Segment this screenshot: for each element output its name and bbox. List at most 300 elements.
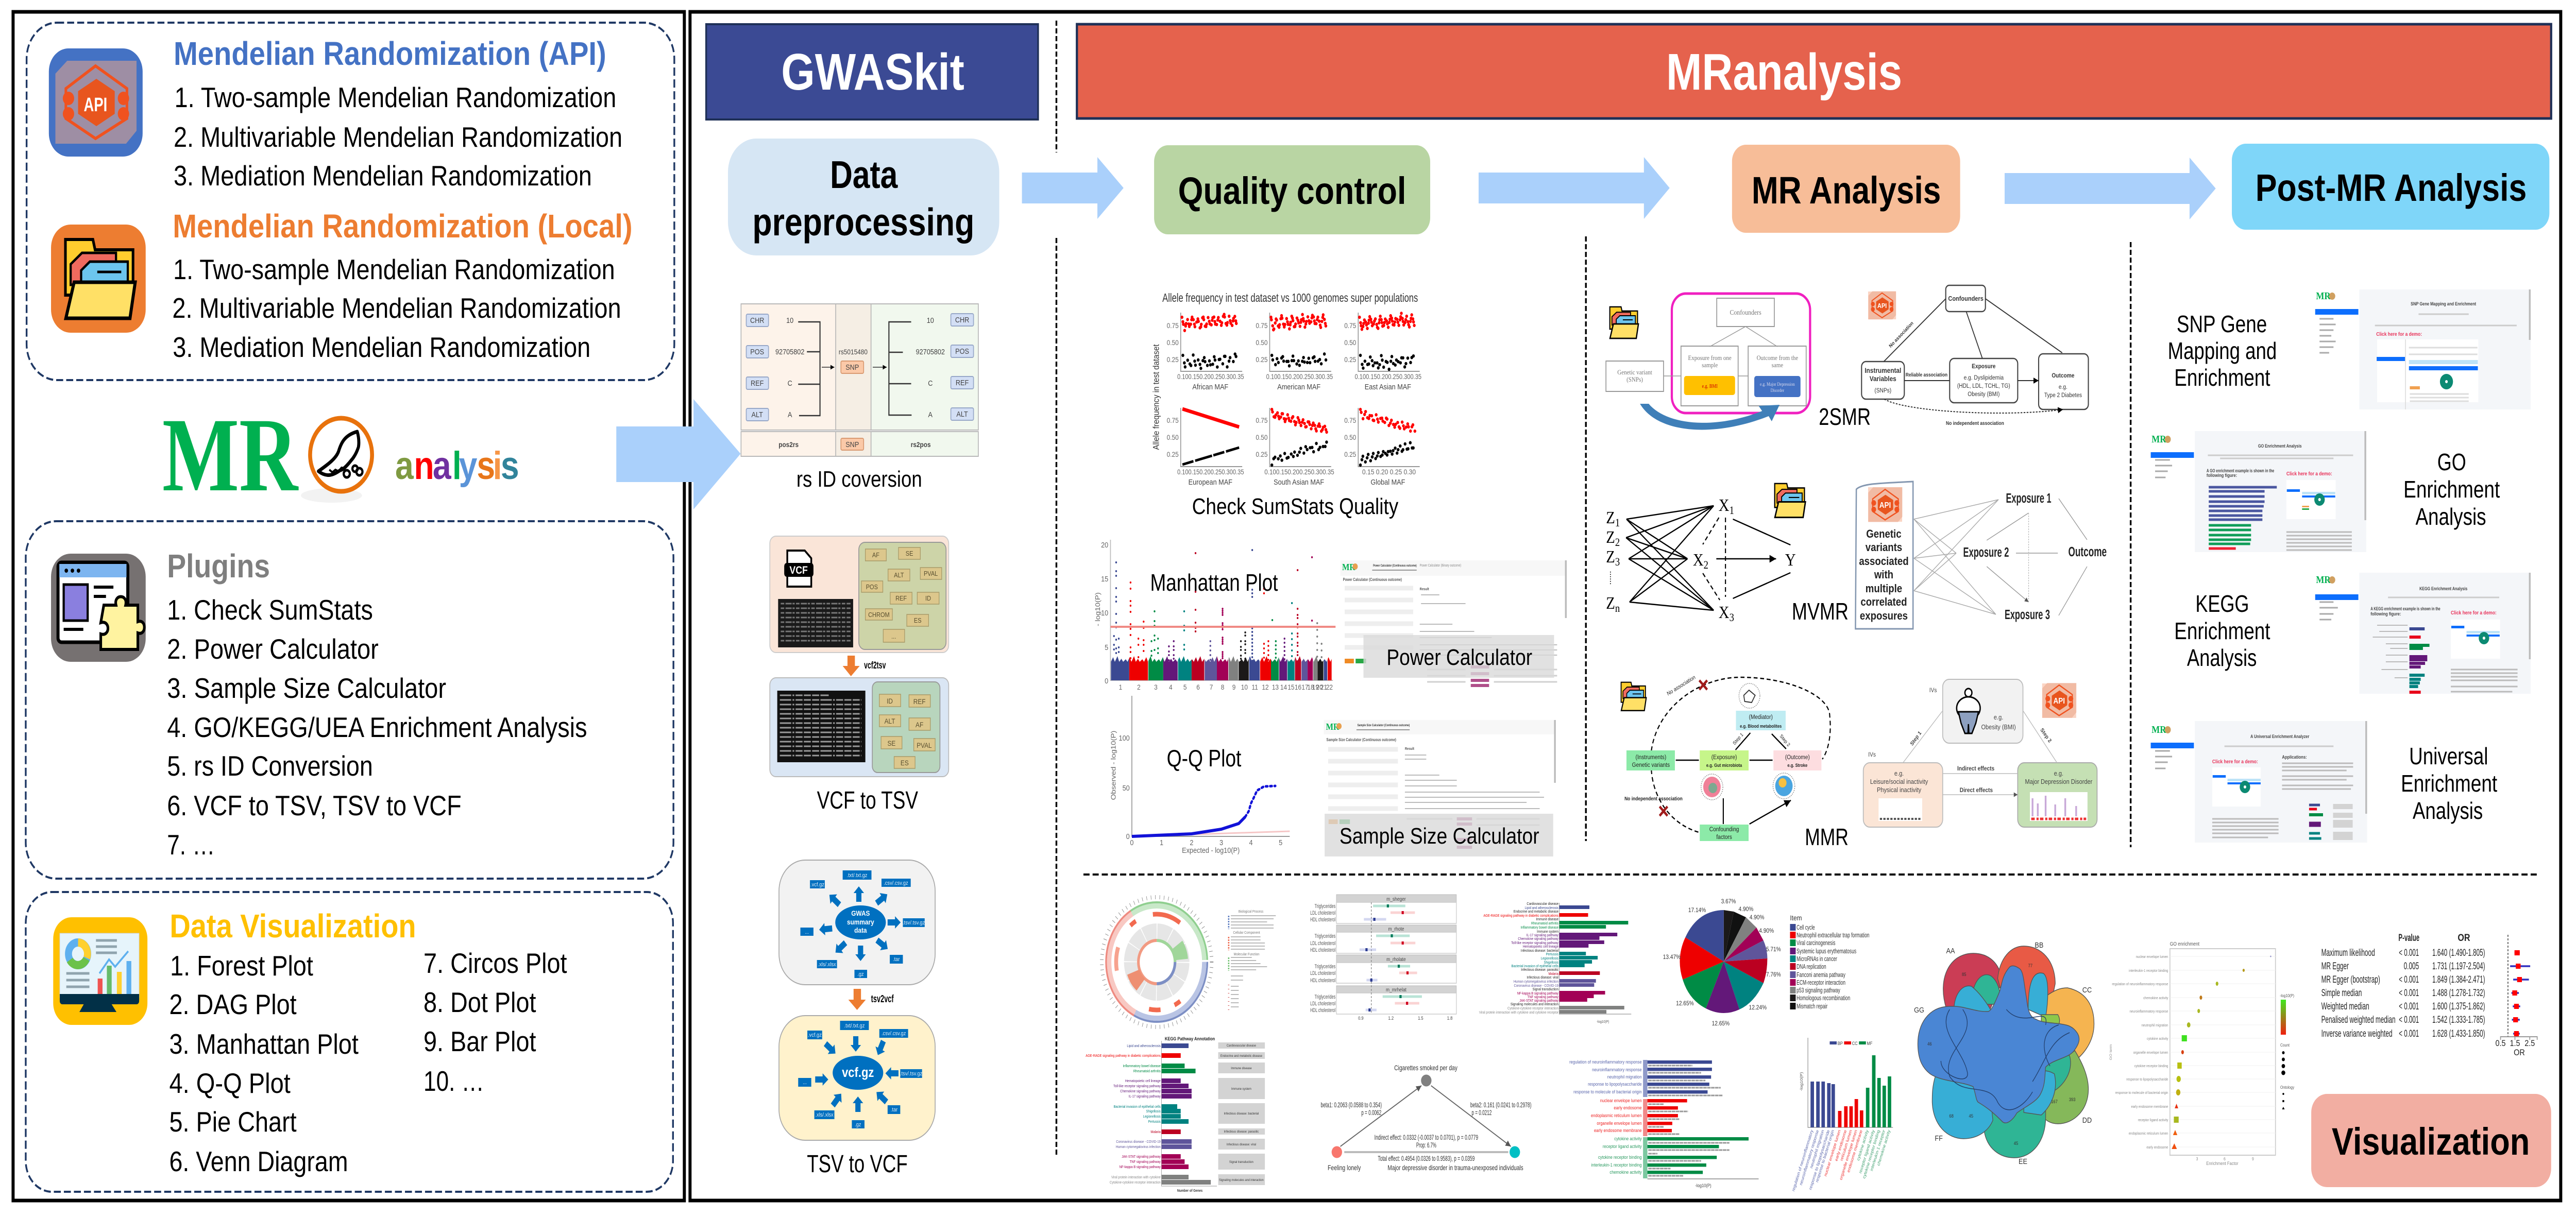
label: Power Calculator	[1363, 635, 1554, 678]
icon: person with obesity	[1957, 689, 1980, 733]
diagram: 2SMR local design: Disorder	[1771, 388, 1784, 393]
chart: KEGG horizontal bars top: Immune system	[1537, 930, 1558, 934]
chart: GO dot plot: Enrichment Factor	[2206, 1160, 2239, 1166]
chart: Venn diagram: 46	[1927, 1041, 1932, 1047]
screenshot: GO Enrichment page	[2150, 431, 2366, 552]
chart: KEGG pathway annotation: Pertussis	[1148, 1120, 1161, 1124]
legend: circos plot: Cellular Component	[1233, 931, 1260, 935]
text block: API methods: 1. Two-sample Mendelian Randomization	[175, 81, 616, 113]
diagram: rs ID conversion: 92705802	[775, 347, 805, 356]
chart: KEGG pathway annotation: Signal transduction	[1229, 1161, 1253, 1164]
chart: KEGG pathway annotation: Legionellosis	[1143, 1115, 1161, 1119]
diagram: rs ID conversion: CHR	[750, 316, 764, 324]
diagram: rs ID conversion: pos2rs	[778, 440, 799, 449]
header: MRanalysis: MRanalysis	[1666, 43, 1902, 101]
text block: plot list column 2: 8. Dot Plot	[423, 986, 536, 1018]
chart: pie chart: 4.90%	[1759, 928, 1774, 934]
chart: Manhattan plot: 2	[1137, 683, 1141, 691]
chart: KEGG pathway annotation: Chemokine signaling pathway	[1120, 1090, 1161, 1093]
chart: MR methods forest table: Penalised weighted median	[2321, 1014, 2396, 1025]
diagram: GWAS summary data formats: summary	[847, 918, 874, 926]
chart: stratified forest plot: HDL cholesterol	[1310, 1007, 1335, 1014]
header: GWASkit: GWASkit	[781, 43, 964, 101]
legend: pie chart: Cell cycle	[1797, 923, 1815, 931]
chart: Q-Q plot: 100	[1119, 733, 1130, 742]
diagram: rs ID conversion: C	[788, 379, 792, 387]
text block: plot list column 1	[169, 950, 359, 1177]
chart: GO horizontal bars bottom: regulation of neuroinflammatory response	[1569, 1059, 1642, 1065]
diagram: 2SMR API design: (HDL, LDL, TCHL, TG)	[1957, 383, 2010, 389]
chart: Manhattan plot: 1	[1119, 683, 1122, 691]
chart: grouped bar plot: receptor ligand activity	[1858, 1128, 1876, 1174]
chart: Manhattan plot: 10	[1241, 683, 1248, 691]
chart: KEGG pathway annotation: Endocrine and metabolic disease	[1221, 1055, 1262, 1058]
chart: allele frequency scatter panels: 0.75	[1344, 416, 1356, 424]
chart: GO dot plot: interleukin-1 receptor binding	[2129, 969, 2168, 973]
chart: Q-Q plot: 50	[1123, 783, 1130, 792]
chart: GO dot plot: early endosome	[2146, 1146, 2168, 1150]
diagram: VCF card: POS	[866, 583, 878, 591]
diagram: vcf.gz formats: .txt/.txt.gz	[844, 1023, 865, 1029]
chart: Manhattan plot: Manhattan Plot	[1150, 570, 1278, 596]
chart: grouped bar plot: BP	[1838, 1040, 1843, 1046]
icon: API: API	[2053, 697, 2065, 706]
chart: stratified forest plot: m_sheger	[1386, 896, 1406, 902]
chart: MR methods forest table: P-value	[2398, 932, 2419, 943]
diagram: MMR API design: IVs	[1868, 751, 1876, 758]
chart: grouped bar plot: response to bacterial origin	[1815, 1129, 1835, 1183]
heading box: MR Analysis	[1732, 145, 1960, 233]
chart: Manhattan plot: 15	[1287, 683, 1295, 691]
chart: stratified forest plot: LDL cholesterol	[1310, 910, 1335, 916]
text block: plugin list: 2. Power Calculator	[167, 633, 379, 665]
chart: mediation DAG plot: Cigarettes smoked per day	[1394, 1064, 1458, 1072]
text block: API methods: 3. Mediation Mendelian Randomization	[174, 160, 592, 192]
chart: GO dot plot: neuroinflammatory response	[2130, 1010, 2168, 1014]
chart: MR methods forest table: 1.849 (1.384-2.471)	[2432, 974, 2485, 985]
chart: stratified forest plot: m_rhote	[1388, 926, 1404, 932]
chart: GO dot plot: cytokine receptor binding	[2134, 1065, 2168, 1068]
chart: grouped bar plot: chemokine activity	[1876, 1128, 1891, 1167]
text block: local methods: 2. Multivariable Mendelian Randomization	[172, 292, 621, 324]
arrow: sidebar to workflow	[616, 399, 741, 509]
heading: Plugins: Plugins	[167, 547, 270, 585]
diagram: 2SMR local design: same	[1772, 361, 1783, 369]
chart: stratified forest plot: Triglycerides	[1315, 964, 1335, 970]
chart: grouped bar plot: -log10(P)	[1799, 1072, 1804, 1091]
chart: grouped bar plot: neuroinflammatory response	[1798, 1129, 1820, 1186]
diagram: 2SMR local design	[1606, 294, 1810, 430]
logo: MR analysis: y	[459, 443, 477, 487]
diagram: MMR local design: (Instruments)	[1635, 754, 1667, 761]
logo: MR analysis: i	[493, 443, 502, 487]
chart: KEGG pathway annotation: Cardiovascular disease	[1227, 1044, 1257, 1048]
header: MRanalysis	[1077, 24, 2551, 118]
diagram: rs ID conversion: ALT	[752, 410, 763, 419]
heading box: Visualization: Visualization	[2332, 1120, 2530, 1163]
chart: KEGG horizontal bars top: Toll-like receptor signaling pathway	[1511, 941, 1559, 945]
screenshot: Sample Size Calculator	[1324, 720, 1556, 855]
diagram: MVMR local design: 3	[1730, 612, 1734, 624]
diagram: MMR API design: e.g.	[1994, 713, 2003, 721]
label: MMR: MMR	[1805, 824, 1849, 851]
diagram: MMR API design	[1863, 679, 2097, 827]
chart: Manhattan plot: 9	[1232, 683, 1235, 691]
chart: KEGG pathway annotation: Infectious disease: bacterial	[1224, 1112, 1259, 1116]
screenshot: Power Calculator: Power Calculator (Binary outcome)	[1420, 564, 1461, 568]
chart: MR methods forest table: 1.628 (1.433-1.850)	[2432, 1028, 2485, 1039]
diagram: MMR API design: IVs	[1929, 687, 1937, 694]
diagram: MMR API design: Physical inactivity	[1877, 786, 1921, 794]
diagram: MVMR local design	[1606, 484, 1805, 624]
chart: KEGG pathway annotation: NF-kappa B signaling pathway	[1120, 1165, 1161, 1169]
diagram: MMR API design: Indirect effects	[1957, 765, 1994, 772]
logo: MR analysis: s	[477, 443, 495, 487]
diagram: MMR API design: Major Depression Disorder	[2025, 778, 2092, 785]
diagram: vcf.gz formats	[779, 1016, 935, 1140]
logo: MR analysis	[162, 397, 519, 513]
diagram: MVMR API design: Exposure 1	[2006, 491, 2052, 506]
chart: MR methods forest table: Maximum likelihood	[2321, 947, 2375, 958]
chart: GO dot plot: GO enrichment	[2170, 941, 2200, 947]
label: KEGG Enrichment Analysis: KEGG	[2195, 591, 2249, 618]
chart: stratified forest plot: Triglycerides	[1315, 994, 1335, 1000]
chart: Q-Q plot: 4	[1249, 838, 1253, 847]
chart: stratified forest plot: HDL cholesterol	[1310, 947, 1335, 953]
chart: Manhattan plot: 8	[1221, 683, 1224, 691]
chart: allele frequency scatter panels: 0.75	[1256, 321, 1267, 330]
chart: Venn diagram: DD	[2082, 1116, 2092, 1124]
icon: API: API	[1879, 501, 1891, 510]
diagram: MMR API design: Leisure/social inactivity	[1870, 778, 1928, 785]
chart: pie chart: 5.71%	[1766, 946, 1781, 953]
heading box: Data preprocessing: Data	[830, 153, 898, 196]
screenshot: Power Calculator: Power Calculator (Continuous outcome)	[1373, 564, 1417, 568]
chart: GO horizontal bars bottom: organelle envelope lumen	[1597, 1120, 1642, 1126]
diagram: MVMR local design: 1	[1730, 505, 1734, 517]
screenshot: GO Enrichment page: following figure:	[2207, 472, 2237, 478]
icon: API	[1868, 291, 1896, 319]
screenshot: SNP Gene Mapping page	[2314, 289, 2531, 409]
diagram: rs ID conversion: ALT	[956, 409, 968, 418]
chart: grouped bar plot: reticulum lumen	[1839, 1129, 1853, 1161]
chart: KEGG horizontal bars top: IL-17 signaling pathway	[1527, 934, 1559, 937]
diagram: MVMR local design: Z	[1606, 547, 1615, 567]
caption: TSV to VCF: TSV to VCF	[807, 1151, 908, 1178]
chart: stratified forest plot: 1.5	[1418, 1015, 1423, 1021]
diagram: vcf.gz formats: .xls/.xlsx	[815, 1112, 834, 1118]
chart: GO dot plot: nuclear envelope lumen	[2136, 955, 2168, 959]
diagram: MMR API design: Direct effects	[1960, 787, 1993, 794]
chart: stratified forest plot: m_mrhelat	[1386, 987, 1406, 992]
label: GO Enrichment Analysis: Analysis	[2415, 504, 2486, 530]
chart: grouped bar plot: CC	[1852, 1040, 1858, 1046]
diagram: GWAS summary data formats: .csv/.csv.gz	[884, 880, 908, 886]
chart: MR methods forest table: OR	[2458, 932, 2470, 943]
diagram: 2SMR API design: Type 2 Diabetes	[2044, 392, 2082, 399]
chart: GO horizontal bars bottom: receptor ligand activity	[1603, 1143, 1642, 1149]
chart: Manhattan plot	[1094, 540, 1335, 691]
diagram: MVMR local design: n	[1615, 603, 1620, 614]
diagram: MVMR API design: Genetic	[1866, 528, 1902, 540]
chart: Q-Q plot: 0	[1130, 838, 1134, 847]
panel: Data Visualization	[26, 892, 673, 1192]
chart: grouped bar plot: early endosome	[1834, 1129, 1848, 1162]
diagram: rs ID conversion: REF	[751, 379, 764, 387]
chart: Manhattan plot: 15	[1101, 574, 1108, 583]
chart: KEGG horizontal bars top: Infectious disease: viral	[1527, 976, 1558, 980]
chart: allele frequency scatter panels: 0.15 0.20 0.25 0.30	[1362, 468, 1416, 476]
label: SNP Gene Mapping and Enrichment: Enrichment	[2174, 365, 2270, 391]
chart: allele frequency scatter panels: Allele frequency in test dataset vs 1000 genomes super populations	[1162, 291, 1418, 304]
chart: allele frequency scatter panels: 0.75	[1344, 321, 1356, 330]
diagram: MVMR API design: with	[1874, 569, 1893, 581]
diagram: 2SMR local design: sample	[1702, 361, 1718, 369]
chart: Q-Q plot: 5	[1279, 838, 1282, 847]
diagram: VCF card: AF	[872, 551, 879, 559]
screenshot: KEGG Enrichment page: A KEGG enrichment example is shown in the	[2370, 606, 2441, 611]
diagram: GWAS summary data formats: .txt/.txt.gz	[847, 872, 867, 879]
chart: KEGG horizontal bars top: Cardiovascular disease	[1527, 902, 1558, 906]
chart: stratified forest plot: Triglycerides	[1315, 933, 1335, 939]
diagram: vcf.gz formats: vcf.gz	[842, 1065, 874, 1080]
chart: stratified forest plot: 1.2	[1388, 1015, 1394, 1021]
chart: pie chart: 4.90%	[1739, 906, 1753, 913]
label: GO Enrichment Analysis	[2403, 449, 2500, 530]
chart: GO horizontal bars bottom: nuclear envelope lumen	[1600, 1098, 1642, 1103]
legend: circos plot: Biological Process	[1239, 910, 1263, 914]
diagram: rs ID conversion: SNP	[845, 440, 859, 449]
chart: MR methods forest table: < 0.001	[2399, 974, 2419, 985]
arrow: vcf2tsv	[843, 656, 886, 676]
icon: folder	[1775, 484, 1805, 518]
diagram: TSV card: AF	[916, 721, 923, 729]
diagram: MVMR local design: Z	[1606, 508, 1615, 527]
caption: Check SumStats Quality: Check SumStats Quality	[1192, 493, 1399, 519]
text block: API methods	[174, 81, 622, 192]
chart: GO dot plot: -log10(P)	[2280, 993, 2294, 998]
diagram: rs ID conversion	[741, 304, 978, 456]
chart: GO horizontal bars bottom: cytokine activity	[1614, 1136, 1642, 1141]
chart: KEGG pathway annotation	[1086, 1036, 1265, 1193]
chart: Q-Q plot: Expected - log10(P)	[1182, 846, 1240, 854]
chart: KEGG pathway annotation: Shigellosis	[1146, 1110, 1161, 1113]
chart: allele frequency scatter panels: 0.50	[1256, 433, 1267, 441]
chart: mediation DAG plot: beta2: 0.161 (0.0241 to 0.2978)	[1470, 1101, 1531, 1109]
diagram: MVMR API design: Exposure 2	[1963, 545, 2009, 560]
diagram: TSV card: SE	[888, 739, 896, 747]
chart: allele frequency scatter panels: 0.75	[1167, 321, 1179, 330]
screenshot: SNP Gene Mapping page: MR	[2316, 290, 2331, 302]
chart: allele frequency scatter panels: 0.100.150.200.250.300.35	[1355, 372, 1421, 381]
legend: pie chart: Item	[1790, 914, 1802, 922]
diagram: 2SMR local design: Confounders	[1730, 308, 1761, 316]
chart: Q-Q plot: Q-Q Plot	[1167, 745, 1242, 772]
chart: Venn diagram: BB	[2035, 940, 2043, 949]
label: KEGG Enrichment Analysis: Analysis	[2187, 645, 2257, 672]
diagram: MVMR local design: 1	[1615, 517, 1620, 529]
legend: pie chart: p53 signaling pathway	[1797, 986, 1840, 994]
diagram: MVMR local design: 2	[1704, 559, 1708, 571]
chart: KEGG horizontal bars top: Bacterial invasion of epithelial cells	[1512, 965, 1558, 968]
heading box: Data preprocessing	[728, 139, 999, 255]
diagram: 2SMR local design: e.g. BMI	[1702, 384, 1718, 389]
chart: GO dot plot: Ontology	[2280, 1085, 2294, 1090]
heading box: Post-MR Analysis: Post-MR Analysis	[2256, 166, 2527, 209]
label: Universal Enrichment Analysis: Analysis	[2413, 798, 2483, 825]
icon: VCF file: VCF	[789, 564, 808, 576]
chart: GO horizontal bars bottom: cytokine receptor binding	[1598, 1154, 1642, 1160]
screenshot: KEGG Enrichment page	[2314, 573, 2531, 694]
text block: plot list column 1: 1. Forest Plot	[170, 950, 313, 982]
diagram: 2SMR API design: (SNPs)	[1874, 387, 1891, 394]
diagram: rs ID conversion: 10	[927, 316, 934, 324]
text block: plugin list: 7. …	[167, 829, 215, 861]
diagram: VCF card: PVAL	[924, 570, 938, 577]
diagram: VCF card: ID	[925, 594, 931, 602]
text block: local methods: 1. Two-sample Mendelian Randomization	[173, 253, 615, 285]
arrow: MR analysis to post-MR	[2005, 158, 2216, 219]
icon: folder	[1621, 682, 1646, 711]
chart: Venn diagram: 45	[2014, 1140, 2019, 1146]
diagram: MMR local design: Step 2	[1779, 733, 1791, 748]
chart: Venn diagram: CC	[2082, 985, 2092, 994]
text block: plot list column 1: 3. Manhattan Plot	[169, 1028, 359, 1060]
diagram: rs ID conversion: C	[928, 379, 933, 387]
diagram: rs ID conversion: A	[788, 410, 792, 419]
chart: Manhattan plot: 10	[1101, 608, 1108, 617]
screenshot: Universal Enrichment page	[2150, 721, 2367, 843]
chart: mediation DAG plot	[1320, 1064, 1531, 1172]
label: SNP Gene Mapping and Enrichment: SNP Gene	[2177, 311, 2267, 338]
chart: MR methods forest table: 0.005	[2404, 961, 2419, 971]
chart: GO dot plot: early endosome membrane	[2131, 1105, 2168, 1109]
diagram: MMR local design: (Outcome)	[1785, 754, 1810, 761]
chart: GO dot plot: Count	[2280, 1042, 2290, 1048]
chart: allele frequency scatter panels: European MAF	[1189, 477, 1232, 486]
chart: KEGG pathway annotation: Hematopoietic cell lineage	[1125, 1079, 1161, 1083]
legend: circos plot	[1229, 910, 1276, 1012]
chart: GO horizontal bars bottom: neuroinflammatory response	[1592, 1067, 1642, 1072]
chart: allele frequency scatter panels: 0.50	[1344, 338, 1356, 347]
chart: grouped bar plot	[1791, 1038, 1893, 1192]
diagram: MMR API design: Step 1	[1909, 730, 1923, 747]
chart: KEGG horizontal bars top: Human cytomegalovirus infection	[1514, 980, 1558, 984]
chart: pie chart: 4.90%	[1750, 914, 1765, 921]
chart: allele frequency scatter panels: 0.50	[1344, 433, 1356, 441]
chart: KEGG horizontal bars top	[1479, 902, 1631, 1024]
chart: GO dot plot: 3	[2196, 1156, 2198, 1161]
chart: KEGG pathway annotation: AGE-RAGE signaling pathway in diabetic complications	[1086, 1054, 1161, 1058]
text block: plot list column 2: 9. Bar Plot	[423, 1025, 536, 1057]
diagram: MMR local design: e.g. Blood metabolites	[1740, 723, 1782, 729]
diagram: 2SMR API design: e.g. Dyslipidemia	[1964, 374, 2004, 381]
heading box: Post-MR Analysis	[2232, 144, 2549, 230]
diagram: MVMR API design: variants	[1866, 542, 1902, 554]
legend: pie chart: Viral carcinogenesis	[1797, 939, 1835, 947]
diagram: 2SMR local design: (SNPs)	[1626, 375, 1643, 383]
legend: pie chart: Systemic lupus erythematosus	[1797, 947, 1856, 955]
chart: allele frequency scatter panels: East Asian MAF	[1365, 382, 1411, 391]
diagram: MMR local design: factors	[1716, 834, 1732, 841]
chart: KEGG pathway annotation: Immune disease	[1231, 1067, 1252, 1070]
chart: allele frequency scatter panels: 0.100.150.200.250.300.35	[1266, 372, 1333, 381]
diagram: GWAS summary data formats: GWAS	[851, 909, 870, 917]
diagram: rs ID conversion: REF	[956, 378, 969, 387]
chart: GO horizontal bars bottom: interleukin-1 receptor binding	[1591, 1162, 1642, 1168]
chart: GO dot plot: response to molecule of bacterial origin	[2115, 1091, 2168, 1095]
chart: Manhattan plot: 7	[1210, 683, 1213, 691]
diagram: GWAS summary data formats: .xls/.xlsx	[818, 962, 836, 968]
chart: Manhattan plot: 14	[1280, 683, 1287, 691]
diagram: MVMR API design: Exposure 3	[2005, 607, 2050, 622]
chart: Q-Q plot: 2	[1190, 838, 1194, 847]
chart: Manhattan plot: 21	[1320, 683, 1327, 691]
chart: Manhattan plot: 19	[1312, 683, 1319, 691]
arrow: blue curve	[1640, 404, 1780, 430]
icon: VCF file	[784, 551, 814, 587]
chart: GO horizontal bars bottom: early endosome	[1614, 1105, 1642, 1110]
text block: plugin list: 1. Check SumStats	[167, 594, 373, 626]
chart: KEGG horizontal bars top: Signal transduction	[1533, 988, 1558, 991]
diagram: vcf.gz formats: .gz	[855, 1122, 861, 1128]
chart: MR methods forest table: 1.542 (1.333-1.785)	[2432, 1014, 2485, 1025]
chart: KEGG pathway annotation: Infectious disease: viral	[1227, 1143, 1256, 1146]
diagram: vcf.gz formats: ...	[803, 1079, 807, 1086]
chart: KEGG pathway annotation: Human cytomegalovirus infection	[1116, 1145, 1161, 1149]
chart: Manhattan plot: 12	[1262, 683, 1269, 691]
diagram: rs ID conversion: SNP	[845, 363, 859, 371]
diagram: MVMR API design: exposures	[1860, 610, 1908, 622]
heading box: MR Analysis: MR Analysis	[1752, 169, 1941, 212]
diagram: rs ID conversion: CHR	[955, 315, 969, 324]
logo: MR analysis: a	[433, 443, 451, 487]
chart: Manhattan plot: 6	[1196, 683, 1200, 691]
diagram: TSV card: REF	[913, 697, 926, 706]
icon: API: API	[84, 94, 107, 116]
chart: GO dot plot: response to lipopolysaccharide	[2126, 1078, 2168, 1082]
diagram: rs ID conversion: 92705802	[916, 347, 945, 356]
chart: mediation DAG plot: Total effect: 0.4954 (0.0326 to 0.9583), p = 0.0359	[1378, 1154, 1475, 1162]
icon: API: API	[1877, 302, 1887, 310]
diagram: MVMR local design: ......	[1608, 571, 1617, 585]
diagram: MMR API design: e.g.	[2054, 769, 2063, 777]
chart: grouped bar plot: regulation of neuroinflammatory	[1791, 1128, 1814, 1192]
chart: stratified forest plot: HDL cholesterol	[1310, 978, 1335, 984]
chart: MR methods forest table: OR	[2514, 1048, 2525, 1057]
legend: pie chart: Fanconi anemia pathway	[1797, 971, 1845, 979]
chart: allele frequency scatter panels: African MAF	[1192, 382, 1228, 391]
chart: mediation DAG plot: p = 0.0212	[1471, 1108, 1492, 1117]
diagram: 2SMR API design: Variables	[1870, 374, 1896, 383]
icon: API	[49, 48, 143, 157]
chart: MR methods forest table: < 0.001	[2399, 1014, 2419, 1025]
diagram: 2SMR API design: No association	[1888, 320, 1914, 349]
chart: allele frequency scatter panels: 0.100.150.200.250.300.35	[1264, 468, 1334, 476]
heading: Data Visualization: Data Visualization	[170, 907, 416, 945]
diagram: VCF card: SE	[906, 550, 913, 557]
label: SNP Gene Mapping and Enrichment	[2168, 311, 2277, 391]
chart: KEGG pathway annotation: Immune system	[1231, 1088, 1251, 1091]
chart: KEGG horizontal bars top: Infectious disease: parasitic	[1521, 968, 1559, 972]
chart: Q-Q plot: 3	[1219, 838, 1223, 847]
chart: pie chart: 12.65%	[1676, 1000, 1694, 1007]
chart: GO horizontal bars bottom: chemokine activity	[1609, 1169, 1642, 1175]
label: GO Enrichment Analysis: GO	[2437, 449, 2466, 476]
diagram: MVMR local design: Y	[1785, 550, 1796, 570]
chart: GO dot plot: GO term	[2109, 1044, 2113, 1060]
chart: MR methods forest table: MR Egger	[2321, 961, 2349, 971]
